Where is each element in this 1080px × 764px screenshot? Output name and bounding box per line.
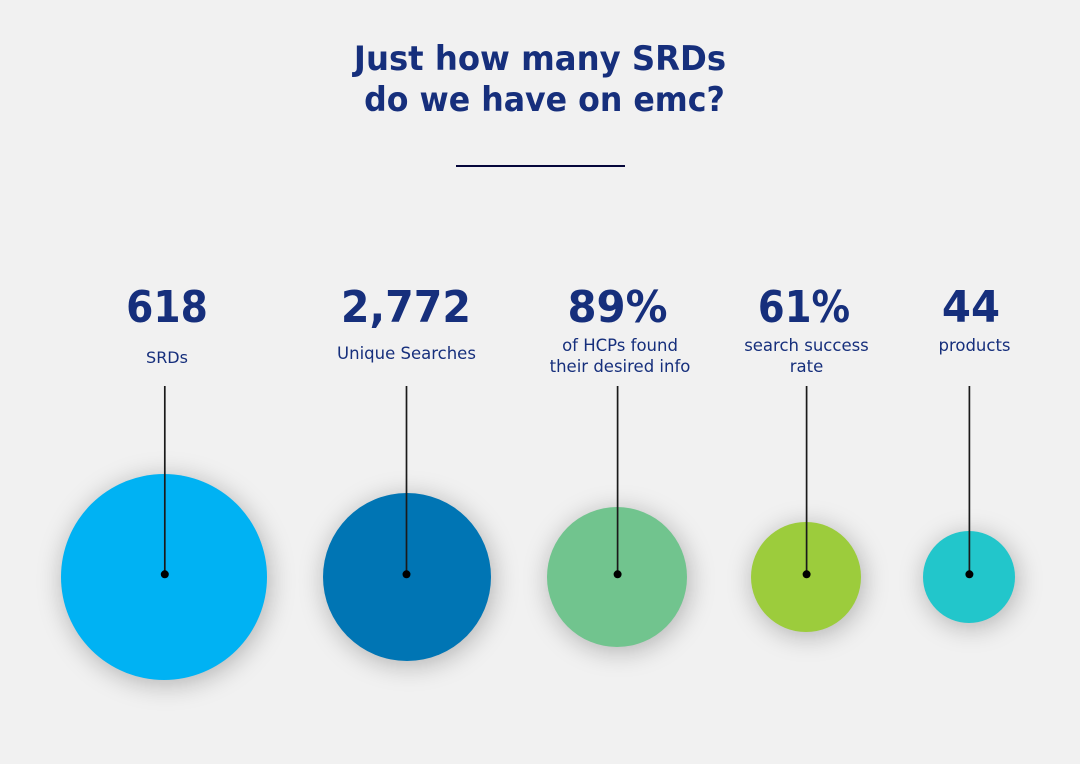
- label: of HCPs found: of HCPs found: [562, 336, 678, 355]
- value: 61%: 61%: [758, 282, 850, 333]
- value: 44: 44: [942, 282, 1000, 333]
- stat: 89%: [550, 282, 690, 376]
- title: do we have on emc?: [364, 80, 725, 120]
- circle: HCPs: [547, 507, 687, 647]
- value: 2,772: 2,772: [341, 282, 471, 333]
- value: 89%: 89%: [567, 282, 668, 333]
- pointer: HCPs: [614, 386, 622, 578]
- label: of HCPs found: their desired info: [550, 357, 690, 376]
- pointer: Unique Searches: [402, 386, 410, 578]
- label: search success rate: [744, 336, 869, 376]
- circle: SRDs: [61, 474, 267, 680]
- title: Just how many SRDs: [354, 39, 726, 79]
- pointer: products: [965, 386, 973, 578]
- circle: Unique Searches: [323, 493, 491, 661]
- circle: search success: [751, 522, 861, 632]
- label: search success rate: search success: [744, 336, 869, 355]
- label: SRDs: SRDs: [146, 348, 188, 367]
- label: search success rate: rate: [790, 357, 823, 376]
- label: of HCPs found: [550, 336, 690, 376]
- value: 618: 618: [126, 282, 208, 333]
- pointer: SRDs: [161, 386, 169, 578]
- title: [352, 39, 726, 120]
- stat: 2,772 Unique Searches: [337, 282, 476, 363]
- stat: 618 SRDs: [126, 282, 208, 367]
- stat: 44 products: [938, 282, 1011, 355]
- stat: 61%: [744, 282, 869, 376]
- label: Unique Searches: Unique Searches: [337, 344, 476, 363]
- circle: products: [923, 531, 1015, 623]
- label: products: products: [938, 336, 1011, 355]
- pointer: search success: [803, 386, 811, 578]
